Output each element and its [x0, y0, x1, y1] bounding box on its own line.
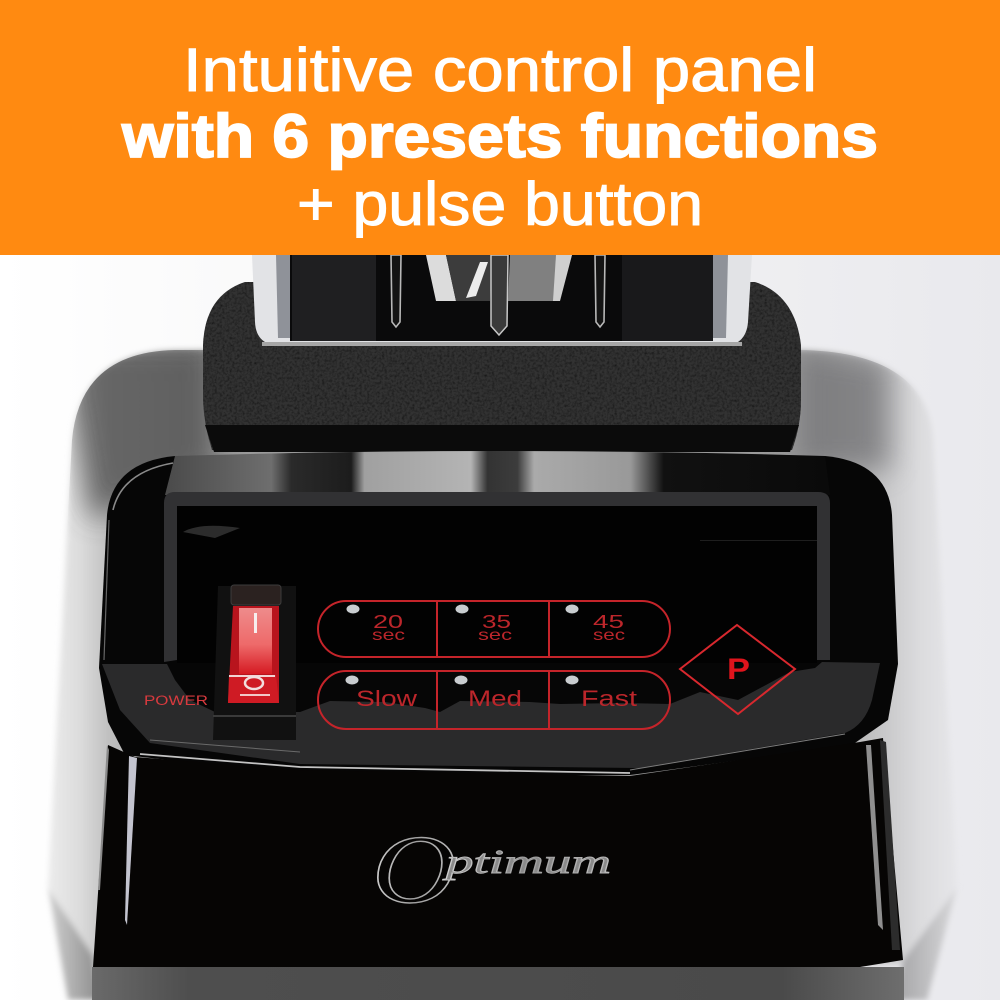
heading banner [0, 0, 1000, 255]
keypad labels: sec [478, 627, 512, 644]
control panel housing [99, 451, 898, 775]
keypad labels: 20 [373, 612, 403, 632]
brand logo: O [372, 816, 456, 924]
switch marks [254, 613, 257, 633]
keypad labels: 35 [482, 612, 511, 632]
jar fins [391, 255, 605, 327]
timer row outline [318, 601, 670, 657]
keypad labels: 45 [593, 612, 624, 632]
keypad labels [356, 612, 750, 711]
pulse diamond [680, 625, 795, 714]
side highlights [125, 756, 137, 925]
indicator dots [346, 604, 578, 684]
heading line 2: with 6 presets functions [121, 102, 878, 170]
heading line 3: + pulse button [297, 170, 703, 238]
heading line 1: Intuitive control panel [183, 36, 817, 104]
rocker switch [213, 585, 296, 740]
keypad labels: Med [468, 686, 522, 711]
blender rear shell [48, 340, 957, 1000]
keypad [318, 601, 795, 729]
rubber jar base [203, 282, 801, 452]
keypad labels: sec [593, 627, 625, 644]
keypad labels: P [727, 653, 750, 686]
speed row outline [318, 671, 670, 729]
lower panel reflection [102, 662, 880, 773]
lower body front [93, 738, 903, 967]
glossy reflection band [165, 451, 830, 495]
blender jar [252, 255, 752, 346]
recessed panel rim [164, 492, 830, 662]
keypad labels: Fast [581, 686, 637, 711]
keypad labels: sec [372, 627, 405, 644]
power label: POWER [144, 693, 208, 708]
brand logo: ptimum [443, 844, 611, 881]
brand logo [372, 816, 611, 924]
bottom base strip [92, 967, 904, 1000]
keypad labels: Slow [356, 686, 417, 711]
blade assembly [426, 255, 572, 335]
